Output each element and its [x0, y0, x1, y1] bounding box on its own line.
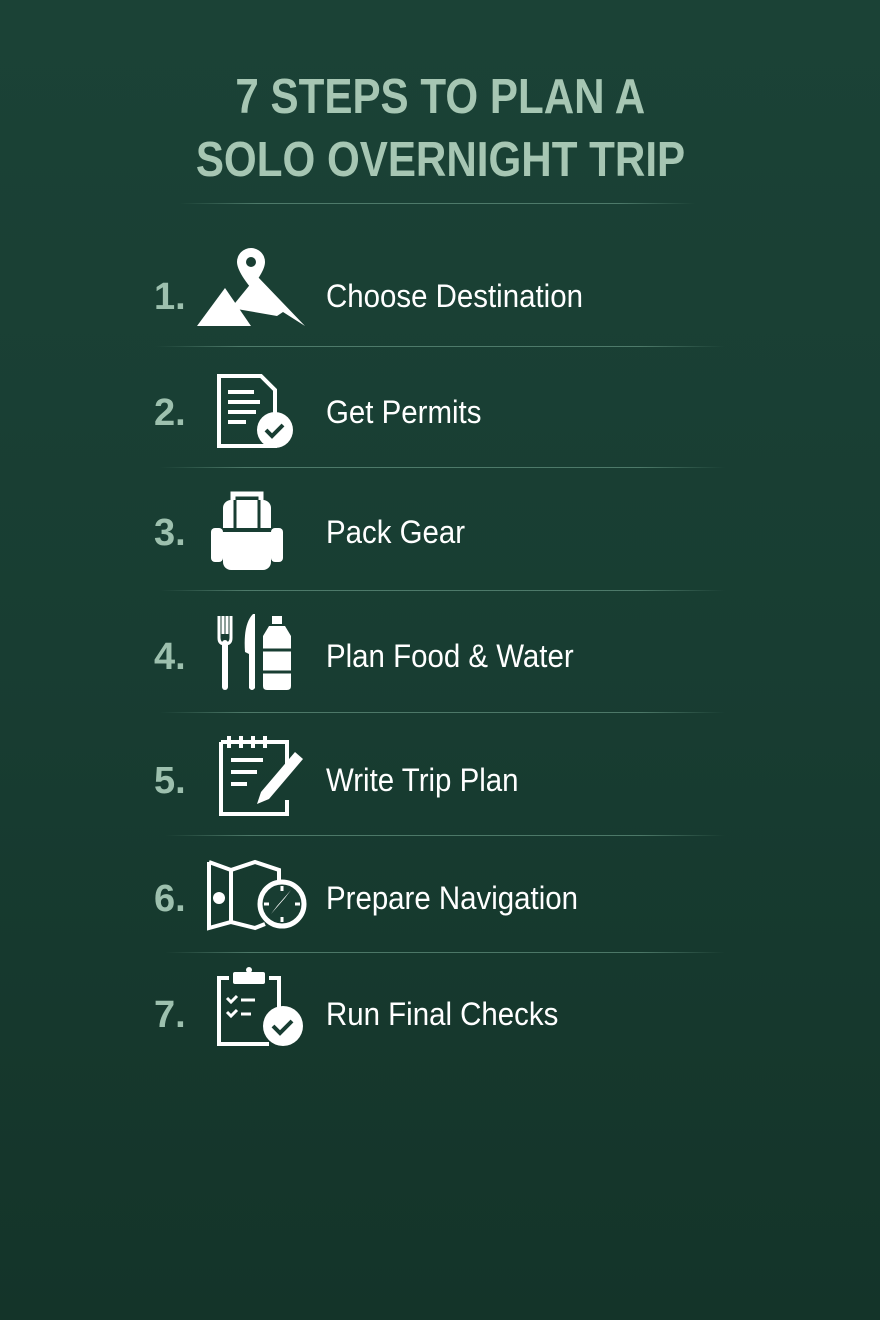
step 7	[154, 967, 558, 1046]
step 7: 7.	[154, 994, 186, 1036]
step 5: 5.	[154, 760, 186, 802]
step 5: Write Trip Plan	[326, 762, 519, 798]
step 6: 6.	[154, 878, 186, 920]
step 1: Choose Destination	[326, 278, 583, 314]
step 4	[154, 614, 574, 690]
step 3	[154, 492, 465, 570]
title	[195, 70, 685, 187]
step 7: Run Final Checks	[326, 996, 558, 1032]
step 6	[154, 860, 578, 931]
icon: notepad with pencil	[219, 736, 303, 816]
step 1: 1.	[154, 276, 186, 318]
icon: backpack	[211, 492, 283, 570]
icon: map and compass	[207, 860, 306, 931]
icon: utensils and bottle	[218, 614, 291, 690]
step 2: 2.	[154, 392, 186, 434]
icon: permit document	[217, 374, 293, 448]
title: SOLO OVERNIGHT TRIP	[195, 133, 685, 187]
icon: clipboard with check	[217, 967, 303, 1046]
step 2	[154, 374, 481, 448]
step 1	[154, 248, 583, 326]
title: 7 STEPS TO PLAN A	[235, 70, 645, 124]
icon: mountains with pin	[197, 248, 305, 326]
step 3: 3.	[154, 512, 186, 554]
step 2: Get Permits	[326, 394, 481, 430]
step 4: Plan Food & Water	[326, 638, 574, 674]
step 3: Pack Gear	[326, 514, 465, 550]
step 5	[154, 736, 519, 816]
step 4: 4.	[154, 636, 186, 678]
step 6: Prepare Navigation	[326, 880, 578, 916]
